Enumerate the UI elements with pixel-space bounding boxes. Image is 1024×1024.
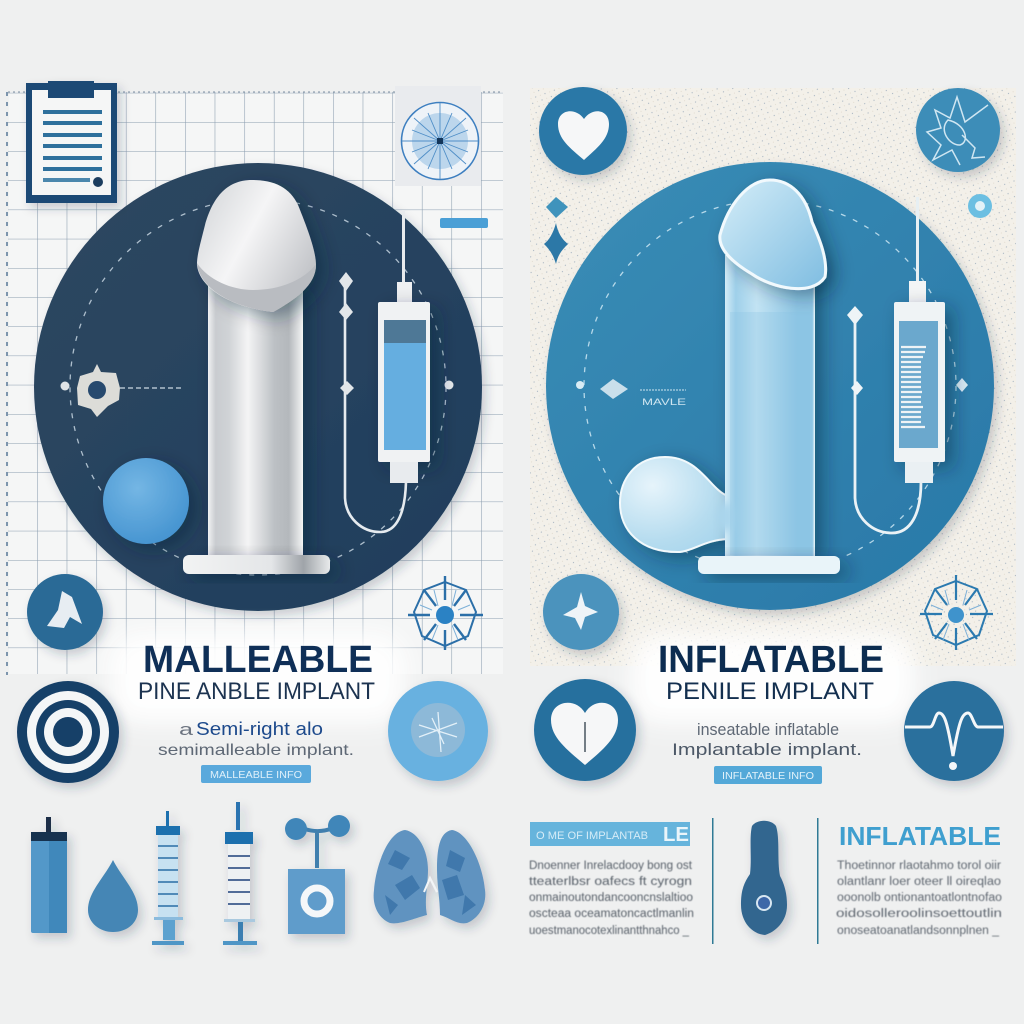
description: inflatable: inseatable inflatable: [697, 720, 839, 739]
clipboard icon: [26, 81, 117, 203]
icon: drop: [88, 860, 138, 932]
inflatable implant device: [620, 180, 840, 574]
circle icon: [27, 574, 103, 650]
pump button: [757, 896, 771, 910]
needle: [916, 197, 919, 285]
info section: inflatable: [529, 818, 1002, 944]
body text: left column: onmainoutondancooncnslaltioo: [529, 892, 693, 904]
banner: left column: LE: [663, 824, 689, 846]
icon: syringe one: [152, 811, 184, 945]
body text: left column: uoestmanocotexlinantthnahco _: [529, 925, 690, 937]
implant head: [720, 180, 826, 289]
tube: [345, 280, 406, 532]
heading: malleable: MALLEABLE: [143, 639, 373, 681]
body text: right column: ooonolb ontionantoatlontnofao: [837, 892, 1002, 904]
syringe body: [894, 302, 945, 462]
body text: left column: tteaterlbsr oafecs ft cyrogn: [529, 876, 692, 888]
heart circle icon: [539, 87, 627, 175]
dotted background: [530, 88, 1016, 666]
implant base: [183, 555, 330, 574]
radial dial icon: [395, 86, 481, 186]
body text: right column: oidosolleroolinsoettoutlin: [836, 908, 1002, 920]
description: malleable: [158, 719, 354, 759]
body text: right column: olantlanr loer oteer ll oireqlao: [837, 876, 1001, 888]
body text: left column: [529, 860, 694, 937]
badge: malleable: MALLEABLE INFO: [210, 770, 302, 781]
compass wheel icon: [408, 576, 483, 650]
grid background: [7, 92, 503, 675]
icon: cylinder: [31, 817, 67, 933]
icon: pump: [285, 815, 350, 934]
dashed orbit: [584, 200, 956, 572]
dark circle: [34, 163, 482, 611]
description: inflatable: [672, 720, 862, 759]
dashed orbit: [70, 199, 446, 575]
needle: [402, 210, 405, 285]
syringe body: [378, 302, 430, 462]
icon: heart: [534, 679, 636, 781]
title halo: right: [630, 634, 915, 724]
subheading: inflatable: PENILE IMPLANT: [666, 678, 874, 705]
divider right: [817, 818, 818, 944]
badge: inflatable: [714, 766, 822, 784]
body text: right column: [836, 860, 1002, 937]
icon: heartbeat: [904, 681, 1004, 781]
body text: left column: oscteaa oceamatoncactlmanlin: [529, 908, 694, 920]
divider left: [712, 818, 714, 944]
icon: pump device: [741, 821, 787, 935]
description: malleable: Semi-right alo: [196, 719, 323, 739]
body text: left column: Dnoenner Inrelacdooy bong ost: [529, 860, 693, 872]
blue ball: [103, 458, 189, 544]
icon: syringe two: [223, 802, 257, 945]
blue bar marker: [440, 218, 488, 228]
banner: left column: [530, 822, 690, 846]
syringe window: [899, 321, 938, 448]
banner: left column: O ME OF IMPLANTAB: [536, 830, 648, 842]
badge: malleable: [201, 765, 311, 783]
tube: [855, 310, 921, 533]
blue circle: [546, 162, 994, 610]
implant head: [197, 180, 316, 312]
swirl icon: [968, 194, 992, 218]
panel: malleable implant: [7, 81, 503, 675]
gear icon: [60, 364, 183, 417]
tube nodes: [847, 306, 863, 395]
syringe fluid: [384, 343, 426, 450]
tube nodes: [339, 272, 354, 395]
pump bulb: [620, 457, 728, 552]
implant shaft: [725, 255, 815, 556]
description: inflatable: Implantable implant.: [672, 740, 862, 759]
heading: inflatable: INFLATABLE: [658, 639, 884, 681]
body text: right column: Thoetinnor rlaotahmo torol oiir: [837, 860, 1001, 872]
icon: light blue lens: [388, 681, 488, 781]
small diamonds: [544, 197, 568, 264]
marker dot: [956, 378, 968, 392]
syringe device: [339, 210, 430, 532]
implant shaft: [208, 285, 303, 556]
icon: target: [17, 681, 119, 783]
malleable implant device: [183, 180, 330, 574]
description: malleable: a: [179, 720, 194, 739]
badge: inflatable: INFLATABLE INFO: [722, 771, 814, 782]
panel: inflatable implant: [530, 87, 1016, 666]
syringe device: [847, 197, 945, 533]
icon row: malleable components: [31, 802, 485, 945]
compass wheel icon: [920, 575, 993, 650]
neck blend: [717, 502, 735, 532]
heading: inflatable label: INFLATABLE: [839, 821, 1001, 851]
circle icon: [543, 574, 619, 650]
left marker label: MAVLE: [642, 397, 686, 407]
title halo: left: [110, 634, 405, 724]
implant base: [698, 556, 840, 574]
body text: right column: onoseatoanatlandsonnplnen _: [837, 925, 1000, 937]
fluid chamber: [730, 312, 810, 555]
description: malleable: semimalleable implant.: [158, 742, 354, 759]
flower circle icon: [916, 88, 1000, 172]
left marker label: [576, 379, 686, 407]
icon: lungs: [374, 830, 485, 923]
subheading: malleable: PINE ANBLE IMPLANT: [138, 678, 375, 705]
scale marks: [901, 347, 926, 427]
syringe window: [384, 320, 426, 450]
marker dot: [444, 380, 454, 390]
